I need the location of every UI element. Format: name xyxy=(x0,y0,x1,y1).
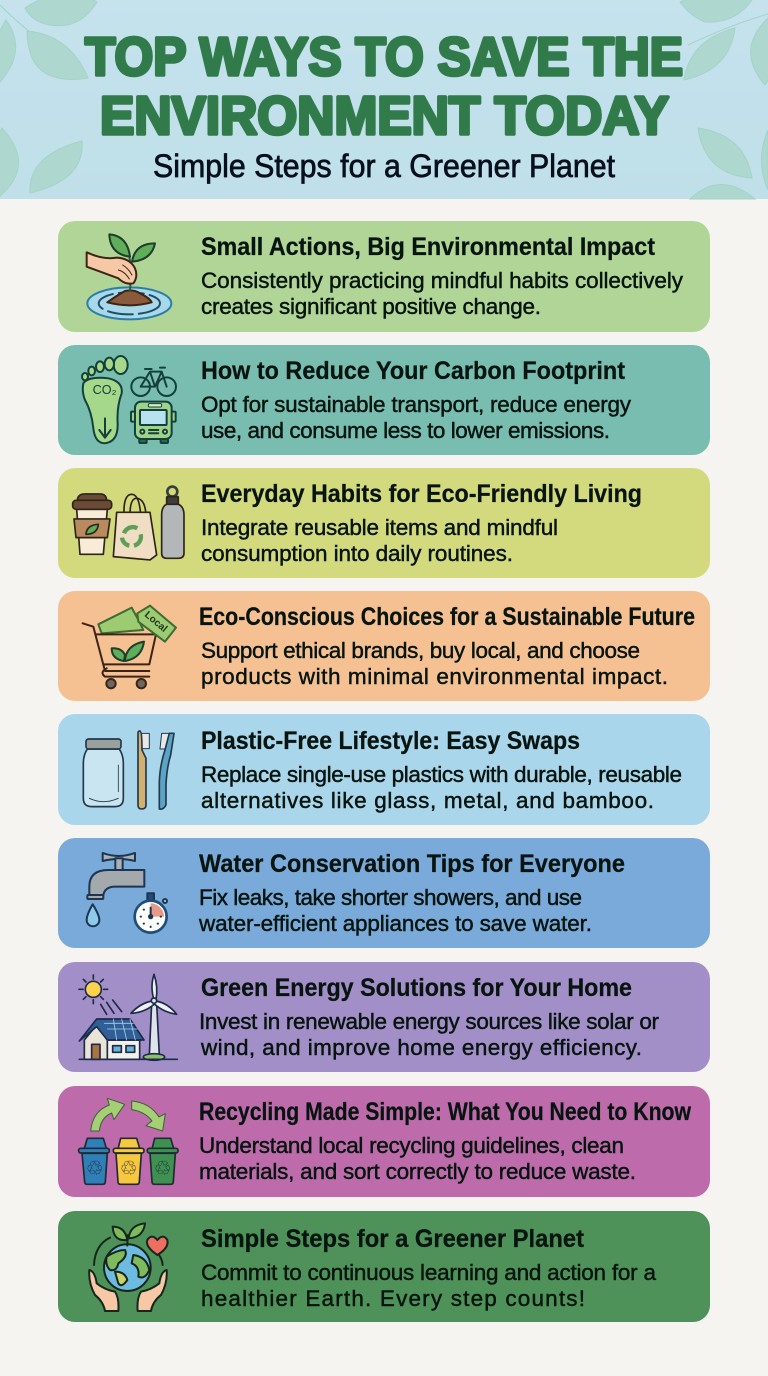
body text: alternatives like glass, metal, and bamboo. xyxy=(201,788,654,813)
body text: use, and consume less to lower emissions. xyxy=(201,418,610,443)
subtitle: Simple Steps for a Greener Planet xyxy=(153,148,615,184)
body text xyxy=(201,1260,656,1311)
icon: hand planting sprout xyxy=(87,234,171,319)
body text xyxy=(198,885,592,936)
body text: products with minimal environmental impact. xyxy=(201,664,668,689)
heading: Small Actions, Big Environmental Impact xyxy=(201,233,656,261)
heading: How to Reduce Your Carbon Footprint xyxy=(201,357,626,385)
body text: Fix leaks, take shorter showers, and use xyxy=(199,885,582,910)
heading: Eco-Conscious Choices for a Sustainable Future xyxy=(199,603,695,631)
icon: glass jar and toothbrushes xyxy=(83,731,174,809)
icon: recycling bins and arrows xyxy=(79,1098,178,1184)
body text xyxy=(201,268,684,319)
panel: recycling xyxy=(58,1086,710,1197)
icon: earth in hands with sprout and heart xyxy=(89,1223,168,1311)
heading: Everyday Habits for Eco-Friendly Living xyxy=(201,480,642,508)
icon: sun, solar house and wind turbine xyxy=(79,974,177,1060)
icon: coffee cup, tote bag and bottle xyxy=(73,487,184,560)
title: TOP WAYS TO SAVE THE xyxy=(85,27,683,87)
panel: small actions xyxy=(58,221,710,332)
icon: faucet, water drop and stopwatch xyxy=(87,853,167,933)
icon: shopping cart with tags: Local xyxy=(142,610,169,635)
icon: recycling bins and arrows: ♲ xyxy=(154,1156,172,1180)
panel: water conservation xyxy=(58,838,710,948)
title: ENVIRONMENT TODAY xyxy=(100,86,669,146)
body text xyxy=(201,762,682,813)
body text xyxy=(201,638,668,689)
body text xyxy=(199,1133,636,1184)
body text: consumption into daily routines. xyxy=(201,541,513,566)
title xyxy=(85,27,683,146)
body text: Opt for sustainable transport, reduce energy xyxy=(201,392,632,417)
heading: Simple Steps for a Greener Planet xyxy=(201,1225,585,1253)
body text: healthier Earth. Every step counts! xyxy=(201,1286,585,1311)
body text: water-efficient appliances to save water. xyxy=(198,911,592,936)
body text: materials, and sort correctly to reduce waste. xyxy=(199,1159,636,1184)
body text: wind, and improve home energy efficiency. xyxy=(200,1035,642,1060)
body text: Support ethical brands, buy local, and choose xyxy=(201,638,640,663)
body text: Consistently practicing mindful habits collectively xyxy=(201,268,684,293)
body text: Invest in renewable energy sources like solar or xyxy=(199,1009,660,1034)
heading: Plastic-Free Lifestyle: Easy Swaps xyxy=(201,727,580,755)
body text: Replace single-use plastics with durable, reusable xyxy=(201,762,682,787)
panel: carbon footprint xyxy=(58,345,710,455)
body text: Integrate reusable items and mindful xyxy=(201,515,558,540)
icon: footprint, bicycle and bus xyxy=(82,356,176,443)
panel: green energy xyxy=(58,962,710,1072)
heading: Water Conservation Tips for Everyone xyxy=(199,850,625,878)
body text: Commit to continuous learning and action for a xyxy=(201,1260,656,1285)
icon: recycling bins and arrows: ♲ xyxy=(120,1156,138,1180)
panel: plastic-free lifestyle xyxy=(58,714,710,825)
body text xyxy=(201,392,632,443)
header banner xyxy=(0,0,768,199)
body text: creates significant positive change. xyxy=(201,294,541,319)
panel: greener planet xyxy=(58,1211,710,1322)
heading: Recycling Made Simple: What You Need to Know xyxy=(199,1098,691,1126)
panel: everyday habits xyxy=(58,468,710,578)
body text: Understand local recycling guidelines, clean xyxy=(199,1133,624,1158)
icon: footprint, bicycle and bus: CO₂ xyxy=(93,383,117,397)
icon: shopping cart with tags xyxy=(83,606,176,688)
body text xyxy=(201,515,558,566)
body text xyxy=(199,1009,660,1060)
panel: eco-conscious choices xyxy=(58,591,710,701)
heading: Green Energy Solutions for Your Home xyxy=(201,974,632,1002)
icon: recycling bins and arrows: ♲ xyxy=(86,1156,104,1180)
